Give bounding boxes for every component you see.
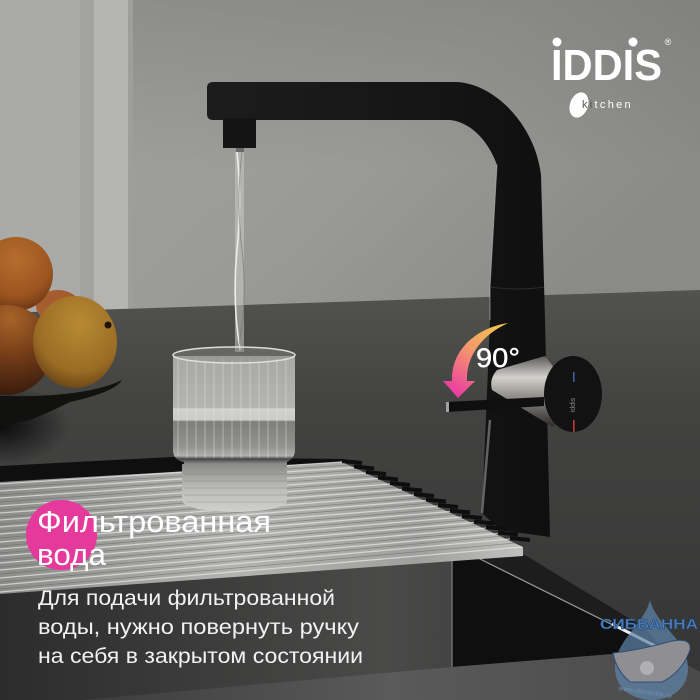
rotation arrow 90 degrees	[443, 323, 508, 398]
watermark	[600, 600, 698, 700]
description: Для подачи фильтрованной	[38, 587, 335, 610]
fruit bowl with oranges	[0, 237, 122, 465]
pink accent circle	[26, 500, 97, 570]
handle brand mark: iddis	[570, 397, 577, 412]
description	[38, 587, 363, 668]
angle label: 90°	[476, 343, 520, 373]
watermark: СИБВАННА	[600, 616, 698, 633]
countertop	[0, 290, 700, 700]
watermark: www.sibvanna.ru	[617, 685, 672, 700]
title: Фильтрованная	[37, 504, 271, 539]
drying rack	[0, 461, 530, 594]
brand logo: kitchen	[582, 99, 633, 111]
title: вода	[37, 537, 107, 572]
faucet body	[207, 82, 550, 537]
description: на себя в закрытом состоянии	[38, 645, 363, 668]
sink front edge shadow	[0, 457, 345, 490]
ribbed glass	[173, 347, 295, 512]
sink interior	[0, 555, 700, 700]
faucet handle	[446, 356, 602, 432]
brand logo: IDDIS	[551, 41, 662, 90]
description: воды, нужно повернуть ручку	[38, 616, 360, 639]
title	[37, 504, 271, 572]
water stream	[235, 152, 244, 352]
brand logo: ®	[665, 37, 672, 47]
brand logo	[551, 37, 672, 120]
wall background	[0, 0, 700, 340]
